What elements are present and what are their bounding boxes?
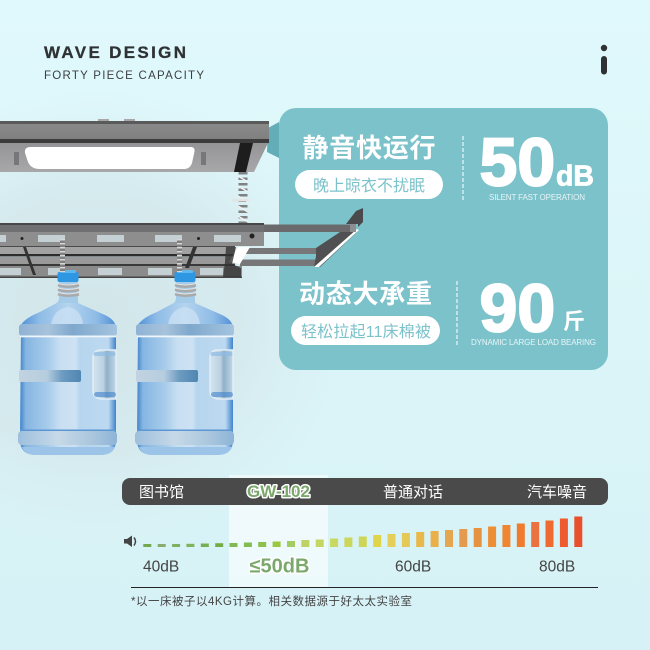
scale header bar — [122, 478, 608, 505]
product value: ≤50dB — [250, 556, 309, 578]
load heading: 动态大承重 — [299, 279, 432, 309]
top unit underside — [0, 143, 268, 172]
stat caption: SILENT FAST OPERATION — [489, 193, 585, 202]
stat caption: DYNAMIC LARGE LOAD BEARING — [471, 338, 596, 347]
scale labels: 图书馆 — [139, 484, 184, 501]
stat: 90斤 — [471, 270, 596, 347]
brand heading — [44, 43, 204, 82]
scale values: 60dB — [395, 558, 431, 576]
noise scale — [122, 475, 608, 608]
scale values: 80dB — [539, 558, 575, 576]
baseline — [131, 587, 598, 588]
stat: 90斤: 斤 — [563, 309, 585, 334]
rack middle rails — [0, 245, 250, 277]
highlight column — [229, 475, 328, 587]
scale values: 40dB — [143, 558, 179, 576]
stat: 90斤: 90 — [480, 270, 555, 346]
divider 1 — [462, 136, 464, 200]
stat: 50dB: dB — [556, 160, 594, 192]
load pill: 轻松拉起11床棉被 — [301, 323, 431, 341]
scale values — [143, 556, 575, 578]
panel: features — [279, 108, 608, 370]
panel logo marks — [14, 152, 206, 165]
water bottle left — [18, 239, 117, 455]
rack lower frame — [0, 266, 242, 278]
rack upper frame — [0, 223, 356, 246]
bar chart: decibel level — [143, 516, 582, 547]
water bottle right — [135, 239, 234, 455]
lifting arm — [232, 172, 249, 224]
feature: silent — [295, 133, 443, 199]
top unit bar — [0, 119, 269, 143]
stat: 50dB: 50 — [480, 124, 555, 200]
scale labels: 汽车噪音 — [527, 484, 587, 501]
drying rack — [0, 119, 363, 278]
panel background — [279, 108, 608, 370]
silent heading: 静音快运行 — [302, 133, 436, 163]
icon: speaker — [124, 536, 136, 547]
rack shade — [267, 122, 279, 158]
product label: GW-102 — [247, 482, 310, 501]
rack far rails — [240, 208, 363, 267]
stat: 50dB — [480, 124, 594, 202]
load pill — [291, 316, 440, 345]
brand subtitle: FORTY PIECE CAPACITY — [44, 70, 204, 82]
silent pill: 晚上晾衣不扰眠 — [313, 177, 425, 195]
icon: info — [601, 45, 607, 74]
LED light — [25, 147, 195, 169]
brand name: WAVE DESIGN — [44, 43, 186, 62]
divider 2 — [456, 281, 458, 345]
scale labels: 普通对话 — [383, 484, 443, 501]
feature: load — [291, 279, 440, 345]
scale labels — [139, 482, 587, 501]
footnote: *以一床被子以4KG计算。相关数据源于好太太实验室 — [131, 594, 412, 608]
silent pill — [295, 170, 443, 199]
